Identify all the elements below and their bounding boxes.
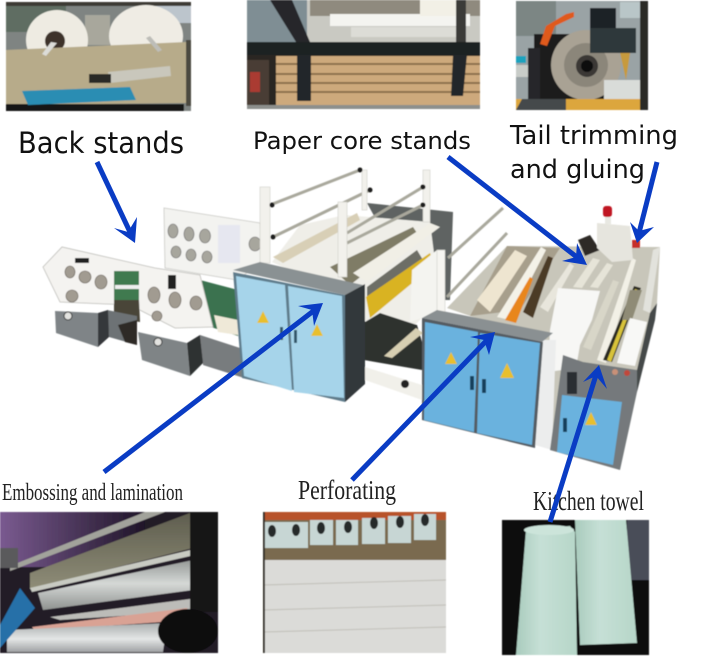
heading: embossing and lamination: Embossing and lamination — [2, 480, 183, 506]
heading: tail trimming and gluing: and gluing — [510, 155, 645, 185]
cabinet: right control — [550, 355, 637, 470]
photo: perforating — [263, 512, 446, 653]
heading: kitchen towel: Kitchen towel — [533, 486, 644, 516]
central laminating section — [260, 168, 507, 400]
cabinet: left electrical — [233, 262, 365, 402]
photo: paper core stands — [247, 0, 480, 109]
rear side plate — [164, 208, 262, 280]
front side plates — [43, 247, 238, 336]
arrow: tail trimming and gluing — [630, 162, 657, 243]
photo: back stands — [6, 2, 191, 111]
heading: back stands: Back stands — [18, 126, 184, 160]
grey base boxes — [55, 310, 244, 378]
arrow: kitchen towel — [550, 365, 607, 522]
heading: perforating: Perforating — [298, 475, 396, 505]
cabinet: centre electrical — [422, 310, 553, 448]
photo: tail trimming and gluing — [516, 1, 648, 110]
arrow: paper core stands — [448, 157, 587, 265]
arrow: back stands — [97, 162, 137, 243]
arrow: perforating — [352, 332, 495, 480]
photo: kitchen towel — [502, 520, 649, 655]
heading: tail trimming and gluing: Tail trimming — [509, 121, 678, 151]
right bed rollers — [447, 206, 660, 450]
machine illustration — [43, 168, 660, 470]
arrow: embossing and lamination — [104, 303, 323, 472]
heading: paper core stands: Paper core stands — [253, 127, 471, 155]
photo: embossing and lamination — [0, 512, 218, 653]
